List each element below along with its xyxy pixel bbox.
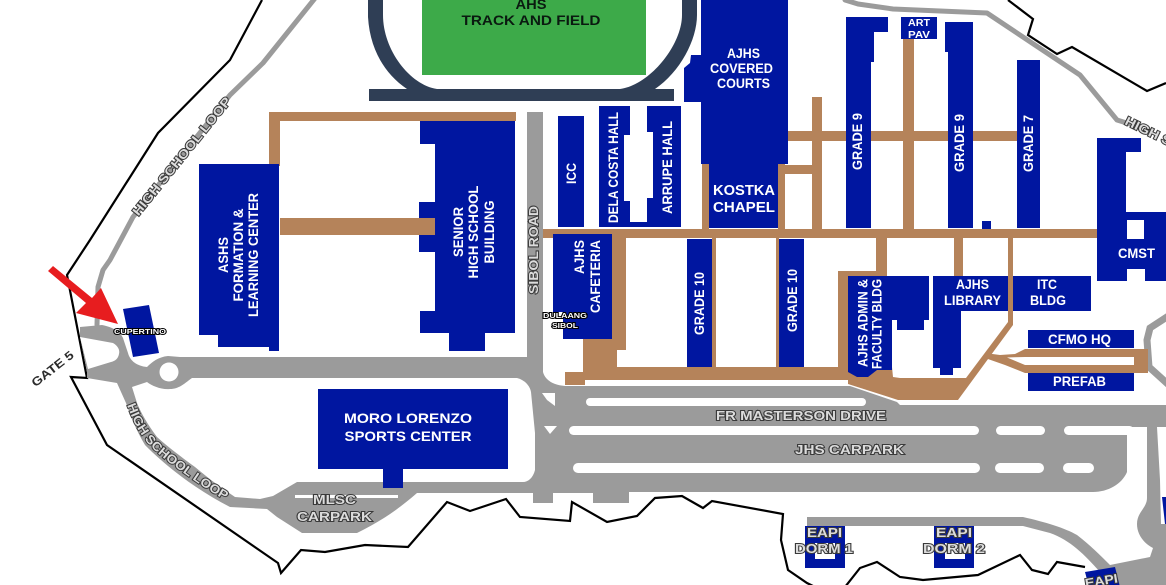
- building: ITC: ITC: [1037, 277, 1057, 292]
- building: senior high school: SENIOR: [451, 207, 466, 257]
- building: AJHS admin and faculty: [848, 276, 929, 377]
- building: AJHS library: LIBRARY: [944, 293, 1001, 308]
- building: AJHS admin and faculty: AJHS ADMIN &: [856, 279, 870, 367]
- building: AJHS cafeteria: AJHS: [572, 240, 587, 274]
- track and field: TRACK AND FIELD: [462, 12, 600, 28]
- label: EAPI dorm 2: EAPI: [936, 526, 972, 540]
- building: grade 9 east: [945, 22, 973, 228]
- label: high school loop north: HIGH SCHOOL LOOP: [130, 95, 234, 218]
- building: AJHS library: [933, 276, 1008, 375]
- label: EAPI dorm 1: EAPI: [807, 526, 842, 540]
- track and field: [422, 0, 646, 75]
- building: AJHS covered courts: [684, 0, 788, 164]
- track oval: [368, 0, 697, 101]
- building: prefab: [1028, 373, 1134, 391]
- building: AJHS cafeteria: CAFETERIA: [588, 240, 603, 313]
- building: ASHS formation and learning center: LEARNING CENTER: [246, 193, 261, 317]
- building: grade 10 west: GRADE 10: [692, 272, 707, 335]
- label: dorm 2 second line: DORM 2: [923, 542, 985, 556]
- building: AJHS admin and faculty: FACULTY BLDG: [870, 279, 884, 369]
- building: Dela Costa Hall: [599, 106, 630, 227]
- parking islands: [295, 393, 1134, 498]
- label: Cupertino: CUPERTINO: [114, 327, 166, 336]
- label: gate 5: GATE 5: [29, 348, 77, 390]
- roundabout island: [160, 362, 178, 382]
- label: MLSC carpark: MLSC: [313, 493, 356, 507]
- building: grade 9 west: GRADE 9: [850, 113, 865, 170]
- building: AJHS covered courts: COVERED: [710, 61, 773, 76]
- building: senior high school: BUILDING: [482, 200, 497, 264]
- white infield pockets of the junction: [80, 337, 119, 369]
- building: grade 10 west: [687, 239, 712, 367]
- building: grade 10 east: GRADE 10: [785, 269, 800, 332]
- label: high school loop south: HIGH SCHOOL LOOP: [126, 402, 229, 498]
- building: CMST: [1097, 138, 1166, 281]
- building: CFMO HQ: CFMO HQ: [1048, 332, 1111, 347]
- building: ICC: [558, 116, 584, 227]
- building: Arrupe Hall: ARRUPE HALL: [660, 121, 675, 214]
- building: Dela Costa Hall: DELA COSTA HALL: [606, 112, 621, 223]
- building: Arrupe Hall: [630, 106, 681, 227]
- building: ASHS formation and learning center: ASHS: [216, 237, 231, 273]
- building: ASHS formation and learning center: [199, 164, 279, 351]
- building: Kostka Chapel: KOSTKA: [713, 183, 776, 199]
- building: AJHS covered courts: COURTS: [717, 76, 770, 91]
- building: AJHS library: AJHS: [956, 277, 989, 292]
- building: grade 9 east: GRADE 9: [952, 114, 967, 172]
- road: high school loop north: [97, 0, 1130, 325]
- building: ITC: BLDG: [1030, 293, 1066, 308]
- building: ASHS formation and learning center: FORMATION &: [231, 208, 246, 302]
- building: ITC: [1013, 276, 1091, 311]
- label: JHS carpark: JHS CARPARK: [795, 443, 904, 457]
- building: grade 9 west: [846, 17, 888, 228]
- label: Dulaang Sibol second line: SIBOL: [552, 321, 578, 330]
- red location arrow: [48, 266, 118, 324]
- building: grade 10 east: [779, 239, 804, 367]
- building: grade 7: [1017, 60, 1040, 228]
- building: Moro Lorenzo sports center: MORO LORENZO: [344, 410, 472, 426]
- building: Moro Lorenzo sports center: SPORTS CENTER: [344, 428, 472, 444]
- building: senior high school: HIGH SCHOOL: [466, 186, 481, 278]
- label: MLSC carpark second line: CARPARK: [297, 510, 372, 524]
- building: EAPI south: [1085, 567, 1120, 585]
- label: Fr Masterson Drive: FR MASTERSON DRIVE: [716, 409, 886, 423]
- covered walkways: [269, 38, 1148, 400]
- building: Kostka Chapel: [709, 160, 778, 228]
- building: ICC: ICC: [564, 163, 579, 184]
- building: art pavilion: PAV: [908, 30, 930, 41]
- road: gate 5 junction and entry drive: [80, 112, 1166, 533]
- building: AJHS cafeteria: [553, 234, 612, 339]
- road: dorm access and southeast corner: [807, 427, 1166, 585]
- road: hexagon loop east: [1147, 315, 1166, 386]
- building: Kostka Chapel: CHAPEL: [713, 200, 775, 216]
- building: art pavilion: [901, 17, 937, 41]
- building: senior high school: [419, 121, 515, 351]
- building: Cupertino: [123, 305, 159, 357]
- building: CFMO HQ: [1028, 330, 1134, 348]
- building: east edge: [1162, 497, 1166, 524]
- gap between CFMO and Prefab walkways: [1007, 357, 1134, 365]
- building: small annex: [982, 221, 991, 229]
- building: CMST: CMST: [1118, 246, 1156, 261]
- label: Dulaang Sibol: DULAANG: [543, 311, 587, 320]
- label: dorm 1 second line: DORM 1: [795, 542, 853, 556]
- building: art pavilion: ART: [908, 18, 930, 29]
- building: EAPI dorm 2: [934, 526, 974, 568]
- building: prefab: PREFAB: [1053, 374, 1106, 389]
- label: Sibol Road: SIBOL ROAD: [527, 206, 541, 294]
- building: grade 7: GRADE 7: [1021, 115, 1036, 172]
- building: Moro Lorenzo sports center: [318, 389, 508, 488]
- building: EAPI dorm 1: [805, 526, 845, 568]
- building: AJHS covered courts: AJHS: [727, 46, 760, 61]
